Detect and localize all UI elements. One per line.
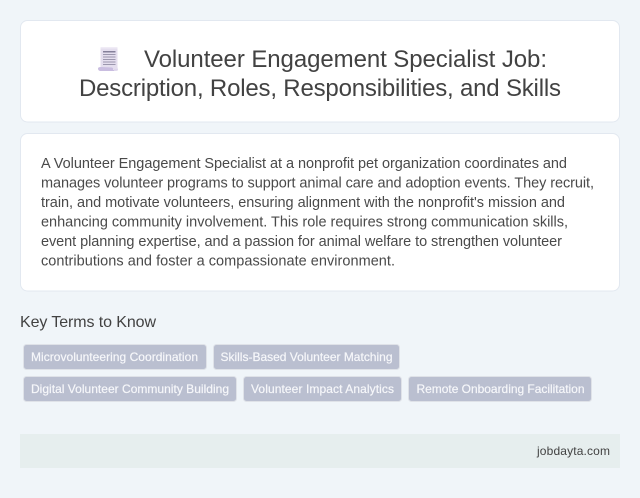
chip: skills-based: Skills-Based Volunteer Matching: [220, 350, 392, 364]
description text: contributions and foster a compassionate environment.: [41, 254, 395, 270]
key term chips: [24, 344, 592, 402]
description text: train, and motivate volunteers, ensuring alignment with the nonprofit's mission and: [41, 195, 565, 211]
footer text: jobdayta.com: [536, 444, 610, 458]
title text: [79, 46, 561, 102]
chip: remote onboarding: Remote Onboarding Facilitation: [416, 382, 584, 396]
chip: microvolunteering: [24, 344, 206, 370]
description text: event planning expertise, and a passion for animal welfare to strengthen volunteer: [41, 234, 562, 250]
chip: remote onboarding: [408, 376, 592, 402]
panel: description card: [20, 134, 620, 291]
chip: skills-based: [214, 344, 400, 370]
chip: impact analytics: Volunteer Impact Analytics: [251, 382, 394, 396]
description text: manages volunteer programs to support animal care and adoption events. They recruit,: [41, 176, 594, 192]
chip: microvolunteering: Microvolunteering Coordination: [31, 350, 198, 364]
chip: impact analytics: [244, 376, 402, 402]
chip: digital community: Digital Volunteer Community Building: [31, 382, 229, 396]
title text: Description, Roles, Responsibilities, and Skills: [79, 75, 561, 102]
title text: Volunteer Engagement Specialist Job:: [144, 46, 547, 73]
description text: A Volunteer Engagement Specialist at a nonprofit pet organization coordinates and: [41, 156, 567, 172]
description text: enhancing community involvement. This role requires strong communication skills,: [41, 214, 568, 230]
chip: digital community: [24, 376, 236, 402]
heading: key terms: Key Terms to Know: [20, 314, 156, 331]
panel: title card: [20, 20, 620, 122]
description text: [41, 156, 594, 270]
icon: receipt scroll: [98, 47, 118, 71]
footer bar: [20, 434, 620, 468]
